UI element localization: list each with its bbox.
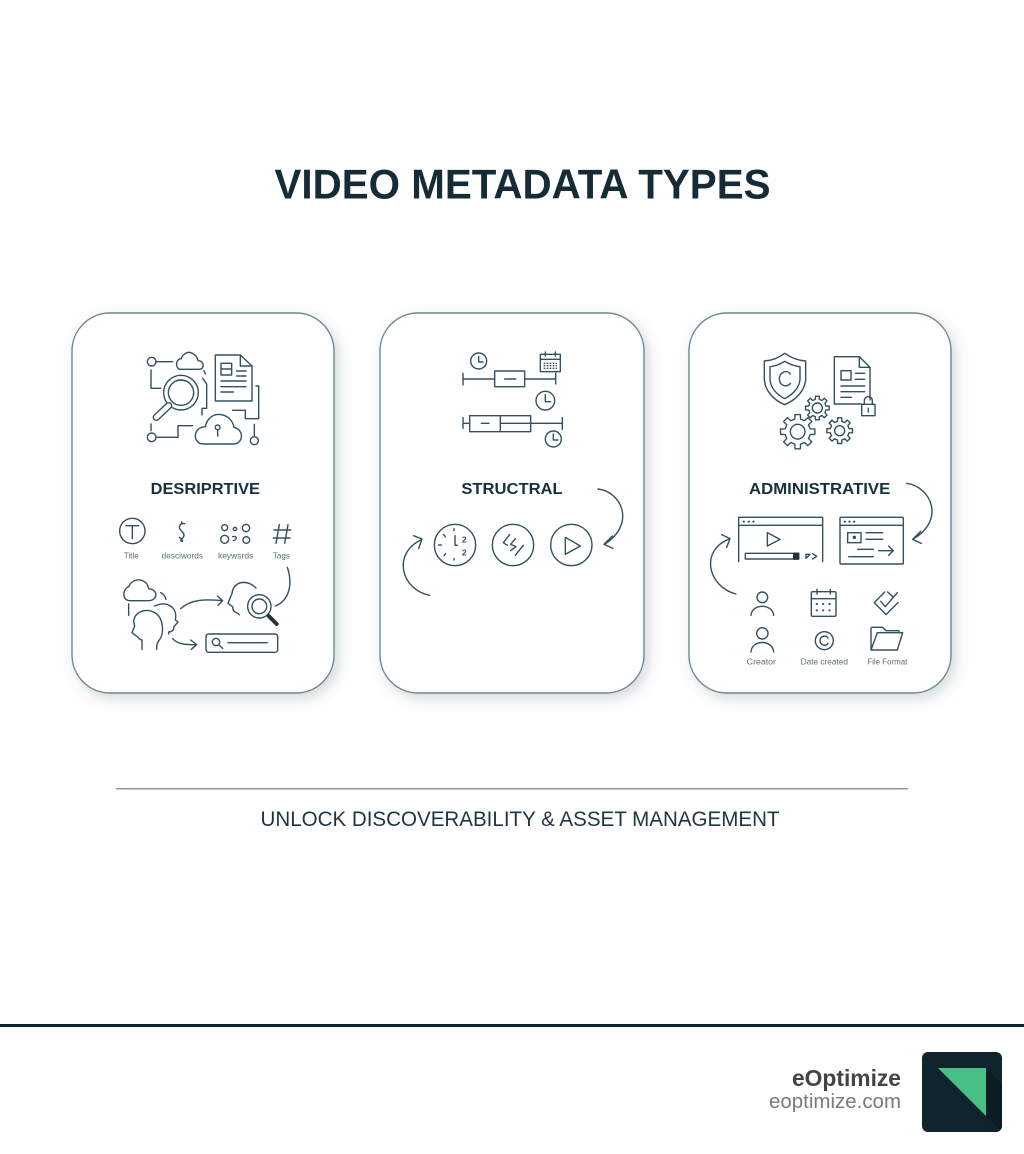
- arrow: top right: [598, 489, 623, 548]
- label: creator: Creator: [747, 658, 776, 667]
- label: tags: Tags: [273, 552, 290, 561]
- icon: keywords: [221, 524, 250, 543]
- icon: clock: 2: [462, 535, 467, 545]
- icon: creator: [751, 592, 774, 615]
- brand name: eOptimize: [792, 1065, 901, 1091]
- icon: tags: [273, 525, 291, 543]
- icon: clock: [434, 524, 476, 566]
- label: keywords: keywsrds: [218, 552, 253, 561]
- icon: people and search flow: [124, 567, 290, 652]
- brand url: eoptimize.com: [769, 1091, 901, 1113]
- icon: play: [551, 524, 592, 566]
- title: VIDEO METADATA TYPES: [274, 160, 770, 208]
- label: title: Title: [124, 552, 139, 561]
- label: date created: Date created: [801, 658, 848, 667]
- icon: title: [120, 518, 145, 544]
- heading: descriptive: DESRIPRTIVE: [151, 481, 260, 498]
- footer rule: [0, 1024, 1024, 1027]
- panel: structural: [380, 313, 644, 693]
- logo: [922, 1052, 1002, 1132]
- heading: administrative: ADMINISTRATIVE: [749, 481, 890, 498]
- panel: descriptive: [72, 313, 334, 693]
- icon: copyright: [815, 632, 833, 650]
- icon: timelines with clocks: [463, 352, 562, 447]
- label: file format: File Format: [867, 658, 908, 667]
- tagline: UNLOCK DISCOVERABILITY & ASSET MANAGEMENT: [260, 808, 780, 831]
- label: description: desciwords: [162, 552, 203, 561]
- icon: lightning: [492, 524, 534, 566]
- icon: shield, document and gears: [764, 353, 875, 449]
- icon: description: [179, 522, 185, 541]
- arrow: bottom left: [711, 535, 736, 594]
- icon: folder: [871, 627, 903, 650]
- arrow: bottom left: [403, 536, 430, 595]
- divider line: [116, 788, 908, 790]
- icon: calendar: [811, 589, 836, 616]
- panel: administrative: [689, 313, 951, 693]
- arrow: top right: [907, 483, 932, 543]
- icon: check: [874, 592, 898, 615]
- icon: creator two: [751, 628, 774, 652]
- icon: clock: 2: [462, 547, 467, 557]
- heading: structural: STRUCTRAL: [461, 481, 563, 498]
- icon: search and cloud network: [147, 352, 259, 445]
- icon: video window: [739, 517, 823, 562]
- icon: document window: [840, 517, 903, 564]
